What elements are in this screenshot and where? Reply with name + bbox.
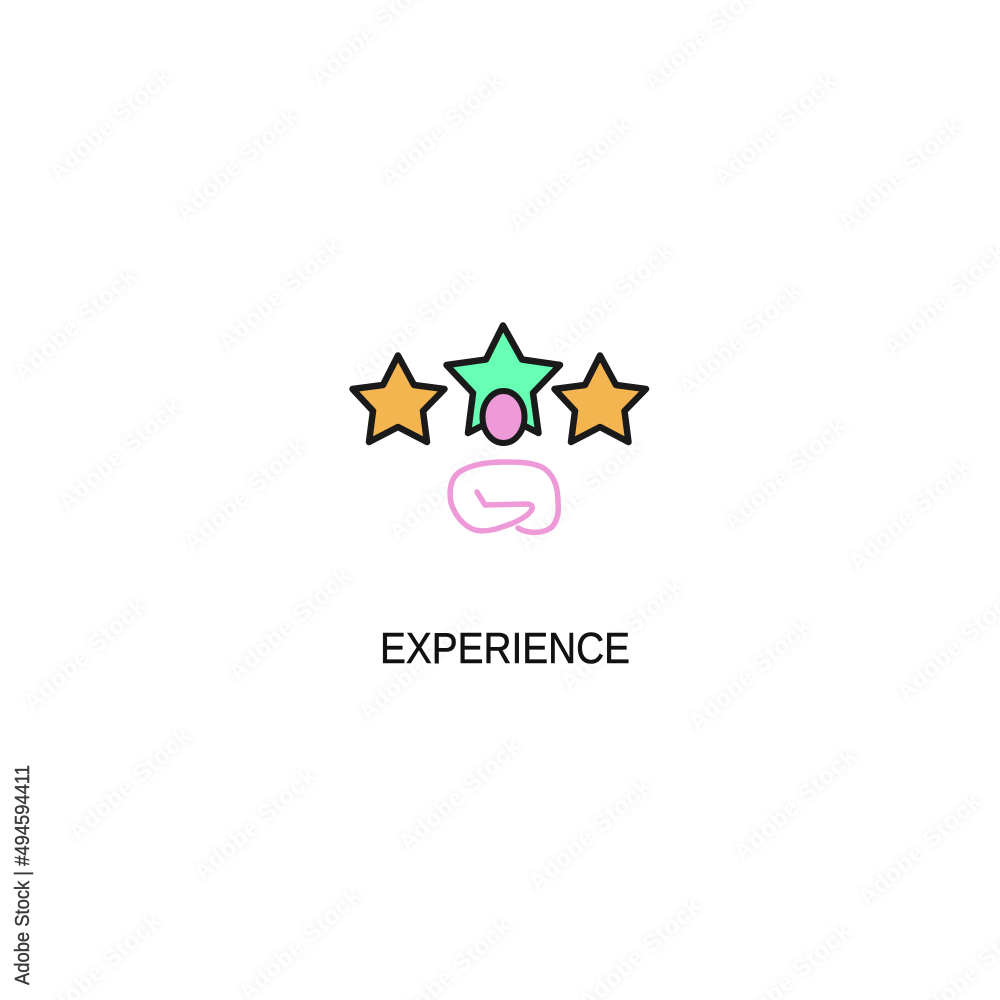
watermark pattern: Adobe Stock bbox=[708, 67, 842, 191]
watermark pattern: Adobe Stock bbox=[213, 232, 347, 356]
watermark pattern: Adobe Stock bbox=[718, 412, 852, 536]
watermark pattern: Adobe Stock bbox=[348, 262, 482, 386]
watermark pattern: Adobe Stock bbox=[43, 62, 177, 186]
watermark pattern: Adobe Stock bbox=[353, 602, 487, 726]
watermark pattern: Adobe Stock bbox=[170, 102, 304, 226]
watermark pattern: Adobe Stock bbox=[673, 277, 807, 401]
icon: person body scribble bbox=[450, 462, 558, 532]
watermark pattern: Adobe Stock bbox=[853, 787, 987, 911]
watermark pattern: Adobe Stock bbox=[18, 592, 152, 716]
title: experience: EXPERIENCE bbox=[380, 624, 630, 673]
watermark pattern: Adobe Stock bbox=[843, 452, 977, 576]
watermark pattern: Adobe Stock bbox=[383, 422, 517, 546]
watermark pattern: Adobe Stock bbox=[545, 237, 679, 361]
watermark pattern: Adobe Stock bbox=[8, 262, 142, 386]
icon: person head bbox=[482, 391, 524, 443]
icon: right star bbox=[554, 356, 646, 442]
watermark pattern: Adobe Stock bbox=[555, 572, 689, 696]
watermark pattern: Adobe Stock bbox=[503, 112, 637, 236]
watermark pattern: Adobe Stock bbox=[53, 392, 187, 516]
watermark pattern: Adobe Stock bbox=[223, 562, 357, 686]
watermark pattern: Adobe Stock bbox=[728, 742, 862, 866]
watermark pattern: Adobe Stock bbox=[375, 67, 509, 191]
stock id label: Adobe Stock | #494594411 bbox=[12, 765, 34, 985]
watermark pattern: Adobe Stock bbox=[683, 612, 817, 736]
watermark pattern: Adobe Stock bbox=[63, 722, 197, 846]
watermark pattern: Adobe Stock bbox=[833, 112, 967, 236]
watermark pattern: Adobe Stock bbox=[393, 732, 527, 856]
icon: left star bbox=[352, 356, 444, 442]
watermark pattern: Adobe Stock bbox=[513, 432, 647, 556]
watermark pattern: Adobe Stock bbox=[188, 762, 322, 886]
watermark pattern: Adobe Stock bbox=[178, 432, 312, 556]
icon: center star bbox=[446, 326, 560, 433]
watermark pattern: Adobe Stock bbox=[523, 772, 657, 896]
